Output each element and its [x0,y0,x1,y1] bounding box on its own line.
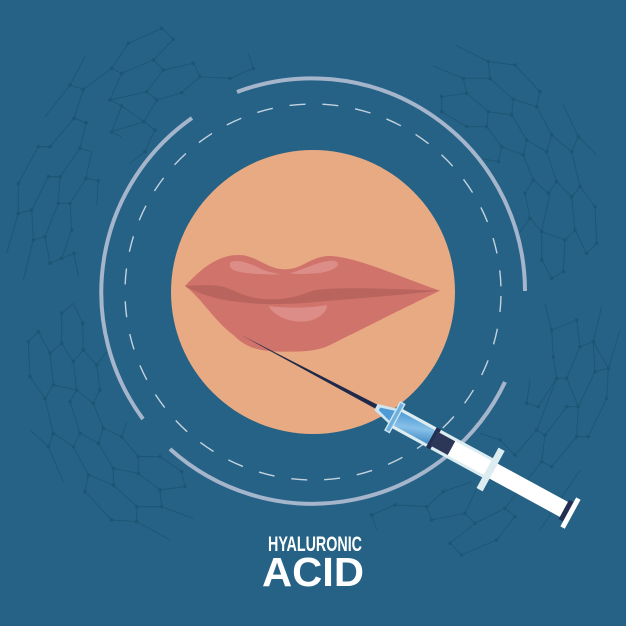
needle [241,335,378,409]
highlight left [230,261,280,274]
outer ring arcs [101,78,525,504]
title line 1: HYALURONIC [268,533,362,556]
barrel [391,408,496,479]
plunger cap [560,497,581,529]
title [262,533,364,595]
cell pattern: bottom right [372,303,620,555]
white interior [448,441,492,475]
cell pattern: bottom left [28,303,193,540]
fluid [393,412,437,445]
rear flange [476,448,505,491]
cell pattern: top right [433,45,597,278]
title line 2: ACID [262,549,364,595]
lips base [185,255,440,352]
lips [185,255,440,352]
plunger rod [486,462,570,518]
dashed ring [125,104,501,480]
face circle [171,150,455,434]
plunger end [559,500,574,521]
highlight right [289,261,338,274]
highlight lower [269,305,327,322]
syringe [365,387,584,534]
front flange [385,402,405,433]
stopper [426,427,441,449]
nozzle [372,399,399,425]
mouth line [185,285,440,304]
cell pattern: top left [7,28,253,280]
